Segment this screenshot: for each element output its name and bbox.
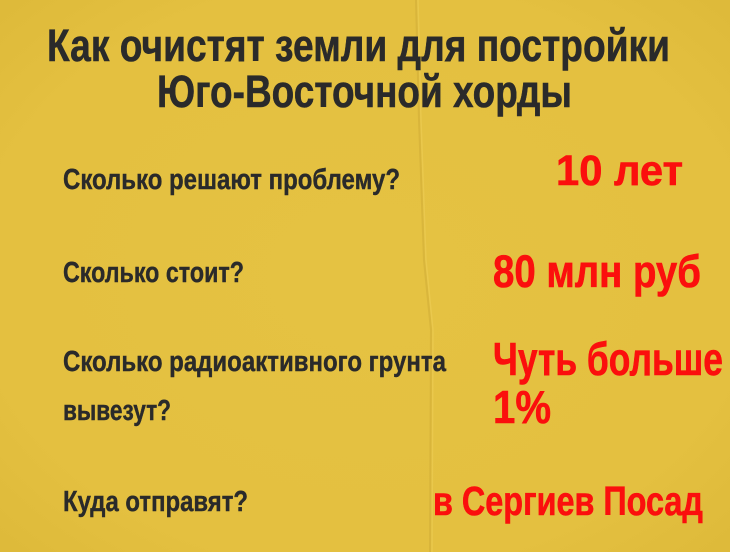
row: duration: Сколько решают проблему? — [63, 164, 400, 196]
row: duration: 10 лет — [556, 147, 683, 195]
row: radioactive soil: 1% — [493, 381, 551, 433]
row: radioactive soil: Сколько радиоактивного грунта — [63, 346, 447, 378]
row: radioactive soil: вывезут? — [63, 395, 171, 427]
row: destination — [63, 478, 703, 524]
title — [47, 20, 670, 117]
row: radioactive soil — [63, 333, 723, 433]
row: duration — [63, 147, 683, 196]
row: cost: Сколько стоит? — [63, 257, 244, 289]
row: cost: 80 млн руб — [493, 246, 701, 297]
row: cost — [63, 246, 701, 297]
row: destination: Куда отправят? — [63, 486, 248, 518]
title: Юго-Восточной хорды — [157, 66, 572, 117]
